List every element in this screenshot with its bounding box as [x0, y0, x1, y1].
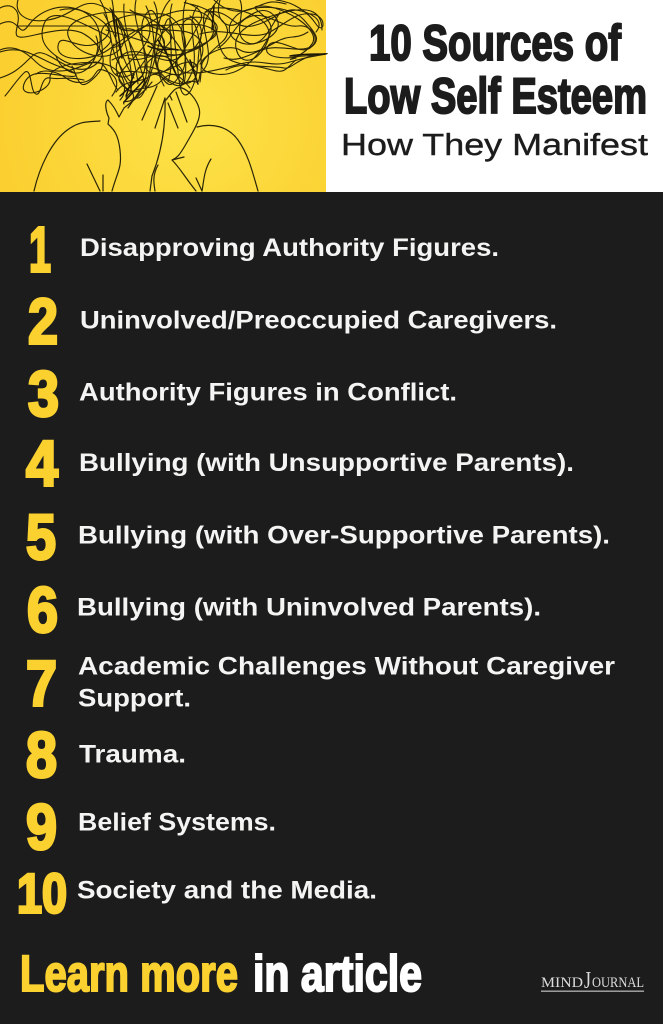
- item 10: 10: [17, 862, 67, 924]
- item 8: Trauma.: [79, 740, 186, 768]
- item 2: [28, 286, 557, 358]
- item 5: 5: [26, 501, 56, 573]
- item 7: Support.: [78, 684, 191, 712]
- item 7: Academic Challenges Without Caregiver: [78, 652, 615, 680]
- subtitle: How They Manifest: [341, 127, 648, 162]
- scribble: darker knot: [112, 6, 325, 102]
- item 5: [26, 501, 610, 573]
- item 6: 6: [27, 574, 58, 646]
- item 5: Bullying (with Over-Supportive Parents).: [78, 522, 610, 550]
- item 3: Authority Figures in Conflict.: [79, 378, 457, 406]
- item 10: Society and the Media.: [77, 876, 377, 904]
- item 4: Bullying (with Unsupportive Parents).: [79, 449, 574, 477]
- call to action: [20, 945, 422, 1002]
- item 3: [28, 358, 457, 430]
- item 2: Uninvolved/Preoccupied Caregivers.: [80, 306, 557, 334]
- list: 10 sources: [17, 214, 615, 924]
- item 7: 7: [26, 648, 57, 720]
- item 6: Bullying (with Uninvolved Parents).: [77, 594, 541, 622]
- illustration: tangled thoughts above a person covering their face: [0, 0, 327, 192]
- item 3: 3: [28, 358, 59, 430]
- item 4: [26, 428, 574, 500]
- item 8: 8: [26, 719, 57, 791]
- item 8: [26, 719, 186, 791]
- item 4: 4: [26, 428, 58, 500]
- item 9: Belief Systems.: [78, 808, 276, 836]
- call to action: Learn more: [20, 945, 238, 1002]
- item 9: [26, 791, 276, 863]
- logo: Mind Journal: [541, 968, 644, 994]
- title: [341, 15, 648, 162]
- item 1: [29, 214, 499, 286]
- call to action: in article: [253, 945, 422, 1002]
- item 9: 9: [26, 791, 57, 863]
- item 10: [17, 862, 377, 924]
- logo: Mind Journal: OURNAL: [592, 975, 644, 991]
- logo: Mind Journal: MIND: [541, 975, 583, 991]
- item 7: [26, 648, 615, 720]
- item 1: 1: [29, 214, 51, 286]
- item 2: 2: [28, 286, 58, 358]
- item 6: [27, 574, 541, 646]
- logo: Mind Journal: J: [584, 968, 591, 994]
- item 1: Disapproving Authority Figures.: [80, 234, 499, 262]
- scribble: tangled lines: [0, 0, 327, 104]
- figure: hands and shoulders outline: [34, 80, 258, 191]
